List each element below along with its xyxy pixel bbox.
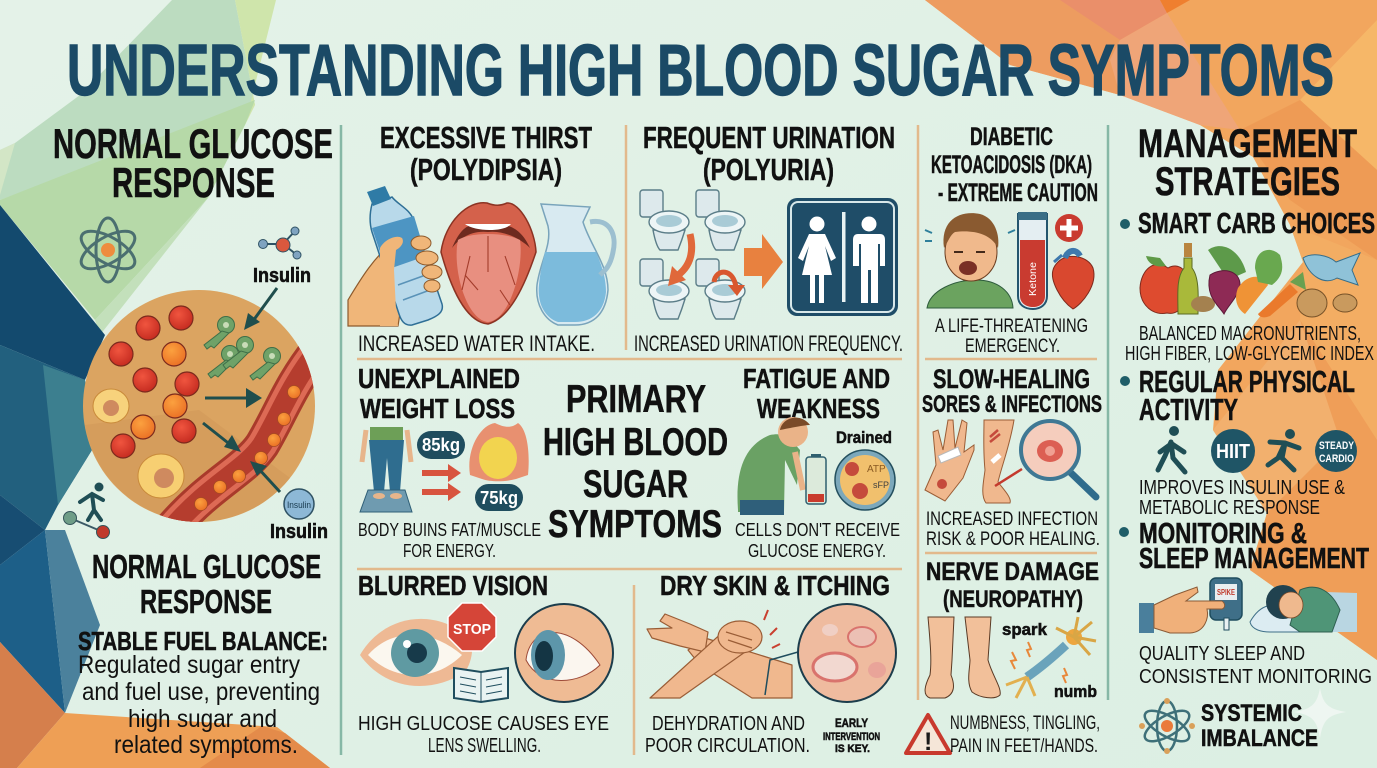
icon: runner network bbox=[64, 482, 110, 538]
icon: rash close-up bbox=[765, 604, 896, 702]
heading bbox=[743, 363, 890, 424]
label: insulin: Insulin bbox=[253, 265, 311, 287]
icon: steady cardio badge: CARDIO bbox=[1319, 453, 1354, 465]
badge: 75kg bbox=[475, 484, 523, 511]
heading bbox=[931, 123, 1098, 207]
heading: - EXTREME CAUTION bbox=[938, 179, 1098, 207]
caption: INCREASED INFECTION bbox=[926, 509, 1098, 530]
panel: excessive thirst bbox=[348, 120, 614, 356]
icon: systemic atom bbox=[1139, 698, 1195, 754]
icon: stop sign: STOP bbox=[453, 621, 491, 638]
icon: HIIT badge bbox=[1211, 429, 1255, 473]
panel: slow-healing sores bbox=[922, 364, 1102, 550]
caption: BODY BUINS FAT/MUSCLE bbox=[358, 520, 541, 540]
glucose circle diagram bbox=[83, 288, 318, 528]
caption: FOR ENERGY. bbox=[403, 541, 496, 561]
text: stable fuel balance: STABLE FUEL BALANCE: bbox=[78, 626, 328, 656]
panel: nerve damage bbox=[906, 558, 1100, 757]
icon: torso bbox=[469, 423, 529, 481]
caption: GLUCOSE ENERGY. bbox=[748, 541, 886, 561]
caption: NUMBNESS, TINGLING, bbox=[950, 713, 1100, 734]
bullet heading: monitoring and sleep: MONITORING & bbox=[1139, 518, 1307, 550]
icon: cell bbox=[835, 450, 895, 510]
caption: METABOLIC RESPONSE bbox=[1139, 497, 1320, 519]
heading: excessive thirst: EXCESSIVE THIRST bbox=[380, 120, 592, 155]
icon: scratch marks bbox=[764, 610, 780, 648]
heading: SLOW-HEALING bbox=[933, 364, 1090, 394]
panel: fatigue and weakness bbox=[735, 363, 900, 561]
blood vessel bbox=[172, 350, 318, 528]
panel: management strategies bbox=[1119, 122, 1375, 754]
subheading: normal glucose response: NORMAL GLUCOSE bbox=[92, 548, 321, 585]
panel: unexplained weight loss bbox=[358, 363, 541, 561]
caption: DEHYDRATION AND bbox=[652, 713, 805, 735]
bullet heading: regular physical activity: ACTIVITY bbox=[1139, 392, 1238, 427]
bullet heading: regular physical activity bbox=[1120, 364, 1355, 427]
caption: CELLS DON'T RECEIVE bbox=[735, 520, 900, 540]
caption: POOR CIRCULATION. bbox=[645, 735, 810, 757]
bullet heading: monitoring and sleep bbox=[1119, 518, 1369, 575]
label: numb: numb bbox=[1054, 682, 1097, 701]
icon: ketone test tube: Ketone bbox=[1028, 262, 1039, 296]
heading: FATIGUE AND bbox=[743, 363, 890, 394]
heading: frequent urination: (POLYURIA) bbox=[703, 152, 834, 187]
note: early intervention: IS KEY. bbox=[835, 743, 870, 755]
icon: runner bbox=[1268, 429, 1299, 470]
caption: EMERGENCY. bbox=[965, 336, 1060, 357]
icon: cell: ATP bbox=[867, 464, 886, 475]
note: early intervention: INTERVENTION bbox=[823, 731, 880, 743]
icon: tired person bbox=[737, 417, 810, 515]
label: systemic imbalance: SYSTEMIC bbox=[1201, 700, 1302, 727]
caption: RISK & POOR HEALING. bbox=[926, 529, 1100, 550]
caption bbox=[735, 520, 900, 561]
icon: heart bbox=[1052, 251, 1094, 309]
caption bbox=[935, 316, 1088, 357]
caption bbox=[358, 713, 609, 757]
badge: 85kg bbox=[417, 431, 465, 459]
icon: injured hand bbox=[925, 420, 974, 501]
icon: distressed person bbox=[925, 213, 1015, 308]
heading bbox=[1138, 122, 1357, 204]
center heading: primary high blood sugar symptoms: HIGH BLOOD bbox=[543, 421, 728, 464]
badge: 85kg: 85kg bbox=[422, 435, 460, 455]
center heading: primary high blood sugar symptoms: PRIMARY bbox=[566, 378, 706, 421]
icon: healthy foods bbox=[1140, 243, 1360, 317]
icon: ketone test tube bbox=[1018, 212, 1047, 309]
text: stable fuel balance bbox=[78, 626, 328, 759]
subheading: normal glucose response: RESPONSE bbox=[140, 583, 272, 620]
heading: KETOACIDOSIS (DKA) bbox=[931, 151, 1092, 179]
text: stable fuel balance: and fuel use, preventing bbox=[82, 678, 320, 706]
icon: glucose meter finger bbox=[1139, 578, 1242, 633]
arrows bbox=[422, 464, 461, 501]
caption: QUALITY SLEEP AND bbox=[1139, 643, 1305, 665]
icon: person on scale bbox=[360, 427, 412, 512]
heading: frequent urination bbox=[643, 120, 895, 187]
heading: NERVE DAMAGE bbox=[926, 558, 1099, 586]
label: spark: spark bbox=[1002, 620, 1048, 639]
icon: blurred eye bbox=[360, 619, 472, 686]
heading: DRY SKIN & ITCHING bbox=[660, 570, 890, 601]
caption bbox=[1125, 323, 1374, 365]
dividers bbox=[341, 125, 1108, 755]
icon: sparkle bbox=[1294, 688, 1346, 738]
caption bbox=[645, 713, 810, 757]
center heading: primary high blood sugar symptoms: SUGAR bbox=[583, 463, 688, 506]
heading: WEIGHT LOSS bbox=[360, 393, 515, 424]
note: early intervention: EARLY bbox=[835, 716, 868, 730]
icon: neuron bbox=[1006, 617, 1096, 698]
badge: 75kg: 75kg bbox=[480, 488, 518, 508]
subheading: normal glucose response bbox=[92, 548, 321, 620]
heading bbox=[926, 558, 1099, 613]
label: insulin: Insulin bbox=[270, 521, 328, 543]
cells bbox=[93, 389, 184, 498]
icon: walker bbox=[1158, 426, 1185, 472]
label: systemic imbalance: IMBALANCE bbox=[1201, 725, 1318, 752]
vessel glucose bbox=[194, 386, 300, 510]
icon: magnifier bbox=[1021, 421, 1096, 497]
icon: dry tongue bbox=[441, 203, 536, 324]
icon: battery bbox=[806, 454, 826, 504]
icon: atom bbox=[76, 218, 140, 282]
icon: steady cardio badge bbox=[1315, 430, 1357, 472]
icon: water jug bbox=[537, 204, 614, 325]
center heading: primary high blood sugar symptoms bbox=[543, 378, 728, 546]
heading: excessive thirst: (POLYDIPSIA) bbox=[410, 152, 562, 187]
caption: LENS SWELLING. bbox=[428, 735, 541, 757]
icon: HIIT badge: HIIT bbox=[1216, 441, 1250, 463]
heading: BLURRED VISION bbox=[358, 570, 548, 601]
caption bbox=[358, 520, 541, 561]
icon: feet bbox=[925, 617, 1000, 698]
panel: diabetic ketoacidosis bbox=[925, 123, 1098, 357]
heading: UNEXPLAINED bbox=[358, 363, 520, 394]
panel: blurred vision bbox=[358, 570, 613, 757]
heading bbox=[922, 364, 1102, 418]
icon: stop sign bbox=[448, 603, 496, 651]
caption: INCREASED URINATION FREQUENCY. bbox=[634, 331, 903, 356]
icon: arrow to restroom bbox=[744, 234, 783, 289]
caption bbox=[1139, 477, 1346, 519]
icon: water bottle in hand bbox=[348, 186, 442, 326]
text: stable fuel balance: related symptoms. bbox=[114, 731, 298, 759]
icon: scratching arms bbox=[647, 614, 792, 698]
icon: curved arrows bbox=[668, 234, 745, 296]
heading: SORES & INFECTIONS bbox=[922, 391, 1102, 418]
heading: normal glucose response: NORMAL GLUCOSE bbox=[53, 120, 333, 167]
note: early intervention bbox=[823, 716, 880, 755]
text: stable fuel balance: high sugar and bbox=[128, 705, 277, 733]
icon: toilets bbox=[640, 190, 745, 319]
icon: injured leg bbox=[983, 420, 1022, 503]
panel: frequent urination bbox=[634, 120, 903, 356]
icon: steady cardio badge: STEADY bbox=[1319, 440, 1355, 452]
panel: normal glucose response bbox=[53, 120, 333, 759]
icon: restroom sign bbox=[787, 198, 898, 316]
icon: insulin bubble: Insulin bbox=[287, 500, 311, 510]
icon: insulin molecule bbox=[258, 227, 301, 259]
panel: dry skin and itching bbox=[645, 570, 896, 757]
label: drained: Drained bbox=[836, 428, 892, 447]
icon: warning triangle bbox=[906, 715, 950, 756]
heading: normal glucose response: RESPONSE bbox=[112, 159, 275, 206]
caption bbox=[926, 509, 1100, 550]
icon: insulin bubble bbox=[284, 489, 314, 519]
icon: medical plus bbox=[1055, 214, 1083, 242]
text: stable fuel balance: Regulated sugar entry bbox=[78, 651, 300, 679]
heading: normal glucose response bbox=[53, 120, 333, 206]
glucose molecules bbox=[109, 306, 199, 458]
heading: DIABETIC bbox=[970, 123, 1053, 151]
caption: INCREASED WATER INTAKE. bbox=[358, 331, 595, 356]
icon: book bbox=[454, 668, 508, 702]
icon: glucose meter finger: SPIKE bbox=[1217, 588, 1235, 597]
icon: warning triangle: ! bbox=[924, 728, 932, 756]
insulin keys bbox=[204, 316, 280, 380]
label: systemic imbalance bbox=[1201, 700, 1318, 752]
caption: PAIN IN FEET/HANDS. bbox=[950, 736, 1098, 757]
heading: (NEUROPATHY) bbox=[943, 586, 1083, 613]
icon: sleeping person bbox=[1250, 585, 1357, 632]
caption bbox=[950, 713, 1100, 757]
heading: WEAKNESS bbox=[757, 393, 880, 424]
arrows bbox=[203, 288, 280, 492]
icon: cell: sFP bbox=[873, 480, 889, 490]
caption bbox=[1139, 643, 1372, 688]
heading: excessive thirst bbox=[380, 120, 592, 187]
caption: HIGH GLUCOSE CAUSES EYE bbox=[358, 713, 609, 735]
icon: eye close-up bbox=[515, 604, 613, 702]
center heading: primary high blood sugar symptoms: SYMPTOMS bbox=[548, 503, 722, 546]
caption: A LIFE-THREATENING bbox=[935, 316, 1088, 337]
heading bbox=[358, 363, 520, 424]
heading: frequent urination: FREQUENT URINATION bbox=[643, 120, 895, 155]
